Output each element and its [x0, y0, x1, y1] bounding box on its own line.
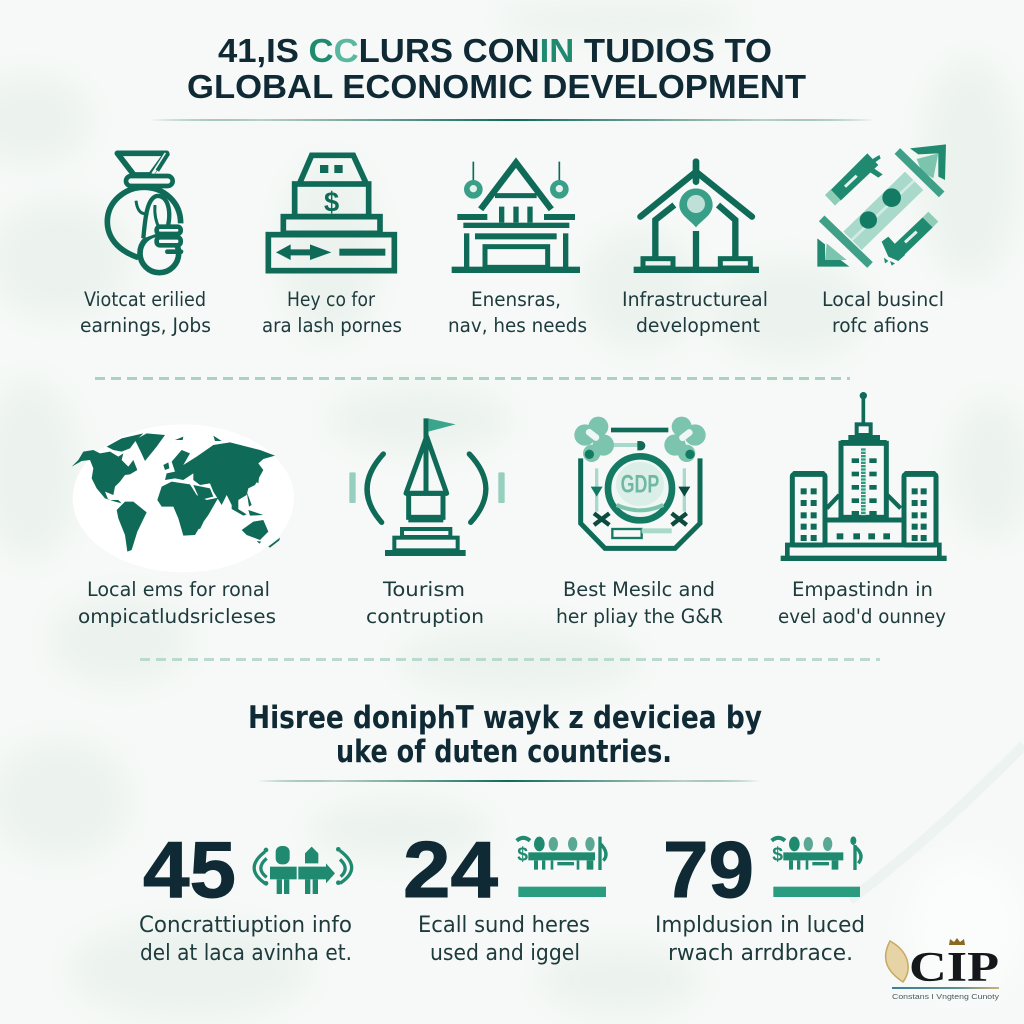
row 1 labels: Local busincl — [822, 288, 944, 311]
row 1 labels: ara lash pornes — [262, 314, 402, 337]
row 2 labels: contruption — [366, 605, 484, 628]
row 1 labels: Infrastructureal — [622, 288, 768, 311]
stat: 45 — [139, 825, 352, 966]
row 1 labels: Enensras, — [471, 288, 561, 311]
logo: CIP — [886, 938, 1000, 1001]
caption — [655, 913, 865, 966]
row 1 labels: Viotcat erilied — [84, 288, 206, 311]
icon: seated group with dollar — [517, 837, 606, 897]
stat: 79 — [655, 825, 865, 966]
row 1 labels: nav, hes needs — [448, 314, 587, 337]
title — [187, 32, 806, 105]
stat: 45: 45 — [143, 825, 236, 914]
section heading: uke of duten countries. — [336, 734, 672, 770]
row 1 labels: rofc afions — [832, 314, 929, 337]
icon: cash register: $ — [324, 187, 339, 218]
icon: infrastructure house with pin — [634, 162, 759, 273]
icon: seated group with dollar: $ — [772, 845, 783, 866]
title: GLOBAL ECONOMIC DEVELOPMENT — [187, 68, 806, 105]
caption: rwach arrdbrace. — [668, 941, 853, 966]
icon: people with arrow — [254, 846, 352, 894]
icon: institution building — [452, 162, 580, 273]
stat: 24 — [403, 825, 606, 966]
row 2: contribution icons — [72, 392, 947, 572]
icon: world map — [72, 424, 294, 572]
row 2 labels — [78, 578, 946, 628]
caption — [139, 913, 352, 966]
icon: GDP badge: GDP — [621, 472, 659, 499]
stat: 79: 79 — [663, 825, 754, 914]
title: 41,IS CCLURS CON IN TUDIOS TO — [218, 32, 772, 69]
caption: used and iggel — [430, 941, 580, 966]
row 2 labels: ompicatludsricleses — [78, 605, 276, 628]
row 2 labels: evel aod'd ounney — [778, 605, 946, 628]
caption: Concrattiuption info — [139, 913, 352, 938]
icon: cash register — [268, 155, 394, 271]
caption — [418, 913, 590, 966]
logo: CIP: CIP — [909, 945, 999, 991]
icon: seated group with dollar — [772, 836, 861, 897]
row 2 labels: Tourism — [382, 578, 465, 601]
icon: city skyline — [781, 392, 947, 561]
row 2 labels: Local ems for ronal — [87, 578, 270, 601]
section heading — [248, 700, 762, 770]
caption: Impldusion in luced — [655, 913, 865, 938]
row 2 labels: Best Mesilc and — [563, 578, 715, 601]
row 1 labels: development — [636, 314, 760, 337]
row 1 labels: Hey co for — [287, 288, 376, 311]
logo: CIP: Constans I Vngteng Cunoty — [892, 994, 1000, 1001]
icon: seated group with dollar: $ — [517, 845, 528, 866]
icon: money bag with hand — [107, 153, 183, 273]
icon: diagonal exchange arrows — [817, 144, 946, 267]
icon: gold leaf — [886, 941, 908, 982]
stat: 24: 24 — [403, 825, 499, 914]
row 2 labels: Empastindn in — [792, 578, 933, 601]
icon: GDP badge — [574, 417, 706, 548]
row 2 labels: her pliay the G&R — [556, 605, 723, 628]
section heading: Hisree doniphT wayk z deviciea by — [248, 700, 762, 736]
icon: crown — [949, 938, 965, 945]
row 1 labels — [80, 288, 944, 337]
row 1: contribution icons — [107, 144, 946, 273]
caption: del at laca avinha et. — [140, 941, 352, 966]
icon: tourism tower — [349, 418, 505, 556]
caption: Ecall sund heres — [418, 913, 590, 938]
row 1 labels: earnings, Jobs — [80, 314, 211, 337]
